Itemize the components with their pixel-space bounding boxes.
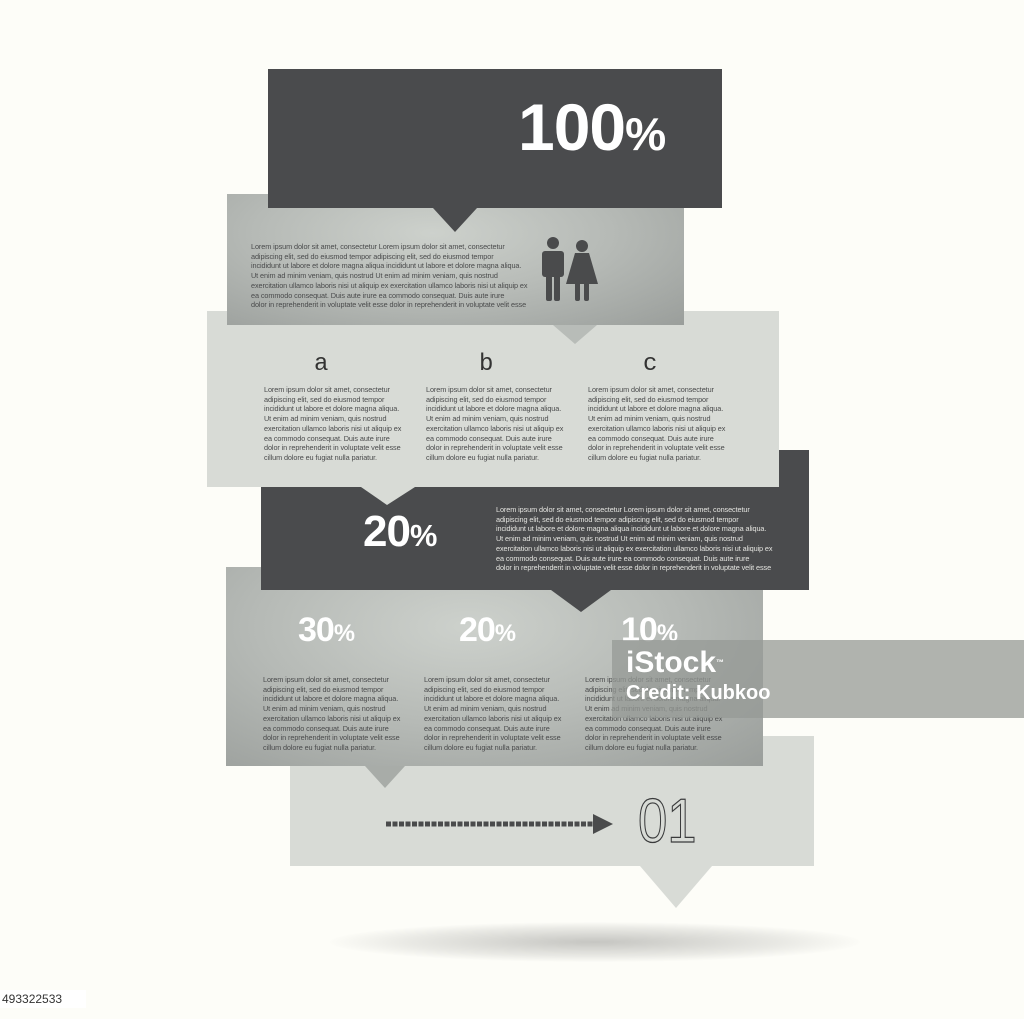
- watermark band: [612, 640, 1024, 718]
- text col 2: Ut enim ad minim veniam, quis nostrud: [424, 704, 546, 713]
- text col b: adipiscing elit, sed do eiusmod tempor: [426, 395, 546, 404]
- number 01: 01: [638, 787, 697, 856]
- shadow: [330, 922, 860, 962]
- text: Lorem ipsum dolor sit amet, consectetur Lorem ipsum dolor sit amet, consectetur: [496, 505, 750, 514]
- stat 20%: 20%: [459, 611, 516, 649]
- text col b: ea commodo consequat. Duis aute irure: [426, 434, 552, 443]
- text col b: incididunt ut labore et dolore magna aliqua.: [426, 404, 561, 413]
- text: dolor in reprehenderit in voluptate velit esse dolor in reprehenderit in voluptate velit esse: [251, 300, 526, 309]
- panel 5: 30 20 10: [226, 567, 763, 788]
- text col c: incididunt ut labore et dolore magna aliqua.: [588, 404, 723, 413]
- text col c: exercitation ullamco laboris nisi ut aliquip ex: [588, 424, 725, 433]
- text: dolor in reprehenderit in voluptate velit esse dolor in reprehenderit in voluptate velit esse: [496, 563, 771, 572]
- text col b: exercitation ullamco laboris nisi ut aliquip ex: [426, 424, 563, 433]
- text: [496, 505, 772, 572]
- panel 2: people: [227, 194, 684, 344]
- text: Lorem ipsum dolor sit amet, consectetur Lorem ipsum dolor sit amet, consectetur: [251, 242, 505, 251]
- text col 2: exercitation ullamco laboris nisi ut aliquip ex: [424, 714, 561, 723]
- stat 100%: 100%: [518, 90, 666, 164]
- text: ea commodo consequat. Duis aute irure ea commodo consequat. Duis aute irure: [251, 291, 504, 300]
- heading b: b: [479, 351, 493, 378]
- text: exercitation ullamco laboris nisi ut aliquip ex exercitation ullamco laboris nisi ut aliquip ex: [496, 544, 772, 553]
- text: incididunt ut labore et dolore magna aliqua incididunt ut labore et dolore magna aliqua.: [251, 261, 521, 270]
- text col 3: incididunt ut labore et dolore magna aliqua.: [585, 694, 720, 703]
- id label: [0, 990, 86, 1008]
- text col 3: cillum dolore eu fugiat nulla pariatur.: [585, 743, 698, 752]
- text col b: [426, 385, 564, 462]
- heading a: a: [314, 351, 328, 378]
- text col 1: incididunt ut labore et dolore magna aliqua.: [263, 694, 398, 703]
- text col a: [264, 385, 402, 462]
- text col a: cillum dolore eu fugiat nulla pariatur.: [264, 453, 377, 462]
- text col c: dolor in reprehenderit in voluptate velit esse: [588, 443, 725, 452]
- panel 1: 100% dark: [268, 69, 722, 232]
- stat 30%: 30%: [298, 611, 355, 649]
- stat 10%: 10%: [621, 611, 678, 649]
- watermark band: Credit: Kubkoo: [626, 682, 770, 704]
- text col c: adipiscing elit, sed do eiusmod tempor: [588, 395, 708, 404]
- text: [251, 242, 528, 309]
- stat 20%: 20%: [363, 507, 437, 556]
- text col c: Ut enim ad minim veniam, quis nostrud: [588, 414, 710, 423]
- text col 3: adipiscing elit, sed do eiusmod tempor: [585, 685, 705, 694]
- text col b: Ut enim ad minim veniam, quis nostrud: [426, 414, 548, 423]
- text col a: incididunt ut labore et dolore magna aliqua.: [264, 404, 399, 413]
- text col 3: [585, 675, 722, 752]
- text col c: [588, 385, 726, 462]
- text col 1: Lorem ipsum dolor sit amet, consectetur: [263, 675, 389, 684]
- heading c: c: [643, 351, 657, 378]
- text col 2: incididunt ut labore et dolore magna aliqua.: [424, 694, 559, 703]
- text col 1: dolor in reprehenderit in voluptate velit esse: [263, 733, 400, 742]
- text: adipiscing elit, sed do eiusmod tempor adipiscing elit, sed do eiusmod tempor: [496, 515, 739, 524]
- icon: man and woman: [542, 237, 598, 301]
- text: exercitation ullamco laboris nisi ut aliquip ex exercitation ullamco laboris nisi ut aliquip ex: [251, 281, 527, 290]
- text col 3: dolor in reprehenderit in voluptate velit esse: [585, 733, 722, 742]
- text: incididunt ut labore et dolore magna aliqua incididunt ut labore et dolore magna aliqua.: [496, 524, 766, 533]
- text col 1: exercitation ullamco laboris nisi ut aliquip ex: [263, 714, 400, 723]
- panel 4: 20% dark: [261, 450, 809, 612]
- arrow: [386, 814, 613, 834]
- text col 1: adipiscing elit, sed do eiusmod tempor: [263, 685, 383, 694]
- text col 3: exercitation ullamco laboris nisi ut aliquip ex: [585, 714, 722, 723]
- text col 2: ea commodo consequat. Duis aute irure: [424, 724, 550, 733]
- text col 1: cillum dolore eu fugiat nulla pariatur.: [263, 743, 376, 752]
- text col a: dolor in reprehenderit in voluptate velit esse: [264, 443, 401, 452]
- text: adipiscing elit, sed do eiusmod tempor adipiscing elit, sed do eiusmod tempor: [251, 252, 494, 261]
- text col 2: [424, 675, 562, 752]
- text col 2: dolor in reprehenderit in voluptate velit esse: [424, 733, 561, 742]
- text: Ut enim ad minim veniam, quis nostrud Ut enim ad minim veniam, quis nostrud: [251, 271, 498, 280]
- panel 6: 01 arrow: [290, 736, 814, 908]
- text col 1: ea commodo consequat. Duis aute irure: [263, 724, 389, 733]
- text col a: Ut enim ad minim veniam, quis nostrud: [264, 414, 386, 423]
- text col c: cillum dolore eu fugiat nulla pariatur.: [588, 453, 701, 462]
- text col b: dolor in reprehenderit in voluptate velit esse: [426, 443, 563, 452]
- text col c: ea commodo consequat. Duis aute irure: [588, 434, 714, 443]
- text col b: Lorem ipsum dolor sit amet, consectetur: [426, 385, 552, 394]
- panel 3: a b c: [207, 311, 779, 505]
- watermark band: iStock™: [626, 646, 724, 679]
- text: Ut enim ad minim veniam, quis nostrud Ut enim ad minim veniam, quis nostrud: [496, 534, 743, 543]
- text col a: adipiscing elit, sed do eiusmod tempor: [264, 395, 384, 404]
- text col 3: ea commodo consequat. Duis aute irure: [585, 724, 711, 733]
- text col b: cillum dolore eu fugiat nulla pariatur.: [426, 453, 539, 462]
- text col a: Lorem ipsum dolor sit amet, consectetur: [264, 385, 390, 394]
- text col 1: [263, 675, 400, 752]
- text: ea commodo consequat. Duis aute irure ea commodo consequat. Duis aute irure: [496, 554, 749, 563]
- text col 2: cillum dolore eu fugiat nulla pariatur.: [424, 743, 537, 752]
- text col 3: Lorem ipsum dolor sit amet, consectetur: [585, 675, 711, 684]
- text col a: exercitation ullamco laboris nisi ut aliquip ex: [264, 424, 401, 433]
- text col 3: Ut enim ad minim veniam, quis nostrud: [585, 704, 707, 713]
- text col 2: Lorem ipsum dolor sit amet, consectetur: [424, 675, 550, 684]
- text col a: ea commodo consequat. Duis aute irure: [264, 434, 390, 443]
- text col 1: Ut enim ad minim veniam, quis nostrud: [263, 704, 385, 713]
- id label: 493322533: [2, 992, 62, 1006]
- text col 2: adipiscing elit, sed do eiusmod tempor: [424, 685, 544, 694]
- text col c: Lorem ipsum dolor sit amet, consectetur: [588, 385, 714, 394]
